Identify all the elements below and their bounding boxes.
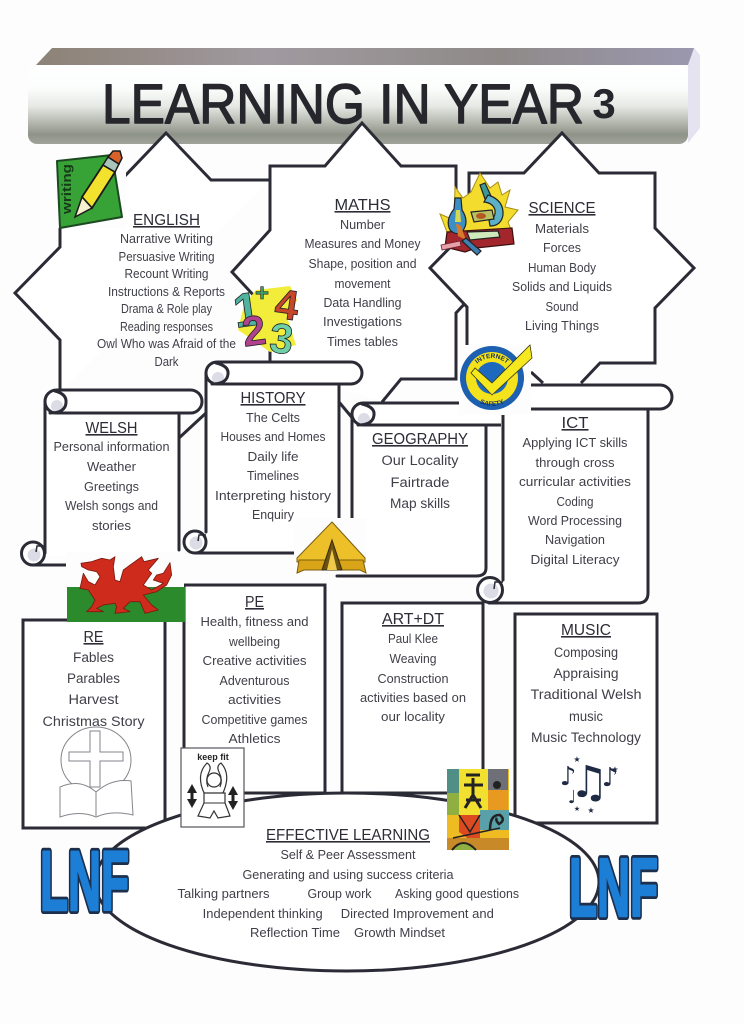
re heading: RE xyxy=(84,629,104,646)
panel: ict scroll xyxy=(478,385,672,603)
art topics xyxy=(360,632,466,724)
pe topics: Creative activities xyxy=(202,654,306,668)
history topics: The Celts xyxy=(246,411,300,425)
science topics: Human Body xyxy=(528,261,597,275)
re topics xyxy=(42,650,145,729)
icon: numbers: 4 xyxy=(272,280,302,330)
maths topics: Shape, position and xyxy=(308,257,417,271)
icon: music notes: ♩ xyxy=(568,787,576,808)
english topics: Narrative Writing xyxy=(120,232,213,246)
panel: pe box xyxy=(184,585,325,793)
art topics: Paul Klee xyxy=(388,632,438,646)
maths topics: Data Handling xyxy=(324,296,402,310)
panel: effective learning xyxy=(95,793,599,971)
panel: geography scroll xyxy=(337,403,501,576)
music topics xyxy=(530,645,642,745)
history topics: Interpreting history xyxy=(215,489,332,503)
pe topics: Competitive games xyxy=(202,713,308,727)
icon: music notes: ♪ xyxy=(560,762,576,792)
icon: celtic roundhouse tent xyxy=(294,518,366,574)
art topics: Construction xyxy=(378,672,449,686)
panel: art and dt box xyxy=(342,603,483,793)
welsh topics xyxy=(54,440,170,533)
icon: music notes: ♫ xyxy=(569,757,609,808)
title banner xyxy=(28,48,700,144)
geography heading: GEOGRAPHY xyxy=(372,431,468,448)
scroll curl bottom xyxy=(184,531,206,553)
music topics: music xyxy=(569,709,603,724)
re topics: Parables xyxy=(67,671,120,686)
history topics: Daily life xyxy=(248,450,299,464)
welsh heading: WELSH xyxy=(86,420,138,437)
art topics: Weaving xyxy=(390,652,437,666)
icon: keep fit card: keep fit xyxy=(197,752,229,762)
scroll curl top xyxy=(50,391,66,413)
icon: lnf left: LNF xyxy=(40,834,129,928)
pe topics: wellbeing xyxy=(228,635,280,649)
icon: internet safety badge: INTERNET xyxy=(474,353,510,364)
icon: keep fit card xyxy=(181,748,244,827)
scroll top xyxy=(531,385,672,409)
ict topics: Applying ICT skills xyxy=(522,436,628,450)
title text: LEARNING IN YEAR xyxy=(102,72,584,135)
title number 3: 3 xyxy=(592,80,616,127)
icon: music notes: ★ xyxy=(587,806,595,815)
geography topics: Fairtrade xyxy=(390,475,450,490)
science topics: Solids and Liquids xyxy=(512,280,612,294)
maths topics: Measures and Money xyxy=(304,237,421,251)
effective learning topics: Asking good questions xyxy=(395,887,519,901)
effective learning topics: Group work xyxy=(308,887,372,901)
icon: music notes: ♪ xyxy=(602,763,618,793)
english topics: Recount Writing xyxy=(124,267,209,281)
ict heading: ICT xyxy=(562,415,589,432)
art topics: our locality xyxy=(381,710,446,724)
effective learning topics: Reflection Time xyxy=(250,926,340,940)
panel: music box xyxy=(515,614,657,823)
ict topics: Navigation xyxy=(545,533,605,547)
ict topics xyxy=(519,436,631,567)
icon: writing pencil xyxy=(54,148,126,228)
panel: science xyxy=(430,133,694,385)
ict topics: curricular activities xyxy=(519,475,631,489)
panel: welsh scroll xyxy=(22,390,206,565)
music topics: Traditional Welsh xyxy=(530,687,642,702)
art heading: ART+DT xyxy=(382,611,444,628)
panel: re box xyxy=(23,620,165,828)
icon: music notes xyxy=(560,755,619,815)
panel: maths xyxy=(232,123,494,402)
icon: music notes: ★ xyxy=(574,805,580,813)
icon: numbers: 3 xyxy=(267,314,296,363)
pe topics: Health, fitness and xyxy=(200,615,309,629)
welsh topics: Welsh songs and xyxy=(65,499,158,513)
icon: internet safety badge: SAFETY xyxy=(480,399,503,406)
english topics: Reading responses xyxy=(120,320,213,334)
re topics: Christmas Story xyxy=(42,714,145,729)
english topics: Instructions & Reports xyxy=(108,285,225,299)
history topics: Timelines xyxy=(247,469,299,483)
art topics: activities based on xyxy=(360,691,466,705)
pe topics: Athletics xyxy=(228,732,280,746)
icon: lnf left xyxy=(40,834,129,928)
geography topics xyxy=(382,453,459,511)
icon: writing pencil: writing xyxy=(59,164,74,215)
effective learning topics: Growth Mindset xyxy=(354,926,446,940)
maths topics: Times tables xyxy=(327,335,398,349)
english topics: Dark xyxy=(154,355,179,369)
maths topics: Investigations xyxy=(323,315,402,329)
panel: english xyxy=(15,133,270,392)
effective learning topics: Talking partners xyxy=(178,887,270,901)
maths topics: Number xyxy=(340,218,385,232)
icon: cross and book xyxy=(60,727,133,817)
ict topics: Word Processing xyxy=(528,514,622,528)
music topics: Appraising xyxy=(554,666,618,681)
english topics: Drama & Role play xyxy=(121,302,213,316)
welsh topics: Personal information xyxy=(54,440,170,454)
icon: lnf left: LNF xyxy=(40,834,129,928)
icon: music notes: ★ xyxy=(573,755,581,764)
scroll top xyxy=(45,390,202,413)
english topics: Owl Who was Afraid of the xyxy=(97,337,236,351)
history heading: HISTORY xyxy=(240,390,306,407)
science topics xyxy=(512,222,612,333)
english heading: ENGLISH xyxy=(133,212,200,229)
geography topics: Map skills xyxy=(390,496,450,511)
maths heading: MATHS xyxy=(334,197,390,214)
icon: welsh flag dragon xyxy=(66,552,185,622)
music topics: Music Technology xyxy=(531,730,641,745)
icon: numbers: 1 xyxy=(230,283,264,339)
scroll top xyxy=(206,362,362,384)
history topics: Houses and Homes xyxy=(220,430,326,444)
effective learning topics: Independent thinking xyxy=(203,907,323,921)
icon: science kit xyxy=(440,173,518,255)
icon: numbers: 2 xyxy=(239,306,269,356)
scroll top xyxy=(352,403,501,425)
science topics: Sound xyxy=(546,300,579,314)
re topics: Harvest xyxy=(68,692,119,707)
geography topics: Our Locality xyxy=(382,453,459,468)
effective learning topics: Generating and using success criteria xyxy=(242,868,454,882)
panel: history scroll xyxy=(184,362,362,553)
music heading: MUSIC xyxy=(561,622,611,639)
english topics xyxy=(97,232,236,369)
icon: paul klee art collage xyxy=(447,769,509,850)
welsh topics: stories xyxy=(92,519,131,533)
icon: lnf right xyxy=(569,841,658,934)
scroll curl top xyxy=(358,404,374,425)
history topics xyxy=(215,411,332,522)
icon: lnf right: LNF xyxy=(569,841,658,934)
ict topics: Digital Literacy xyxy=(530,553,620,567)
pe topics: activities xyxy=(228,693,281,707)
ict topics: through cross xyxy=(536,456,614,470)
effective learning topics: Directed Improvement and xyxy=(341,907,494,921)
effective learning topics xyxy=(178,848,519,940)
icon: lnf right: LNF xyxy=(569,841,658,934)
maths topics xyxy=(304,218,421,349)
english topics: Persuasive Writing xyxy=(118,250,215,264)
re topics: Fables xyxy=(73,650,114,665)
history topics: Enquiry xyxy=(252,508,295,522)
science topics: Forces xyxy=(543,241,581,255)
music topics: Composing xyxy=(554,645,618,660)
pe heading: PE xyxy=(245,594,264,611)
science topics: Materials xyxy=(535,222,589,236)
maths topics: movement xyxy=(334,277,391,291)
scroll curl bottom xyxy=(22,542,45,565)
icon: numbers: + xyxy=(255,280,269,307)
icon: internet safety badge xyxy=(459,344,532,415)
scroll curl bottom xyxy=(478,578,503,602)
scroll curl top xyxy=(212,363,228,384)
welsh topics: Weather xyxy=(87,460,136,474)
icon: numbers xyxy=(230,280,302,363)
icon: music notes: ★ xyxy=(611,765,619,774)
welsh topics: Greetings xyxy=(84,480,139,494)
ict topics: Coding xyxy=(556,495,594,509)
pe topics: Adventurous xyxy=(220,674,290,688)
effective learning heading: EFFECTIVE LEARNING xyxy=(266,827,430,844)
science topics: Living Things xyxy=(525,319,599,333)
science heading: SCIENCE xyxy=(528,200,596,217)
effective learning topics: Self & Peer Assessment xyxy=(280,848,416,862)
pe topics xyxy=(200,615,309,746)
